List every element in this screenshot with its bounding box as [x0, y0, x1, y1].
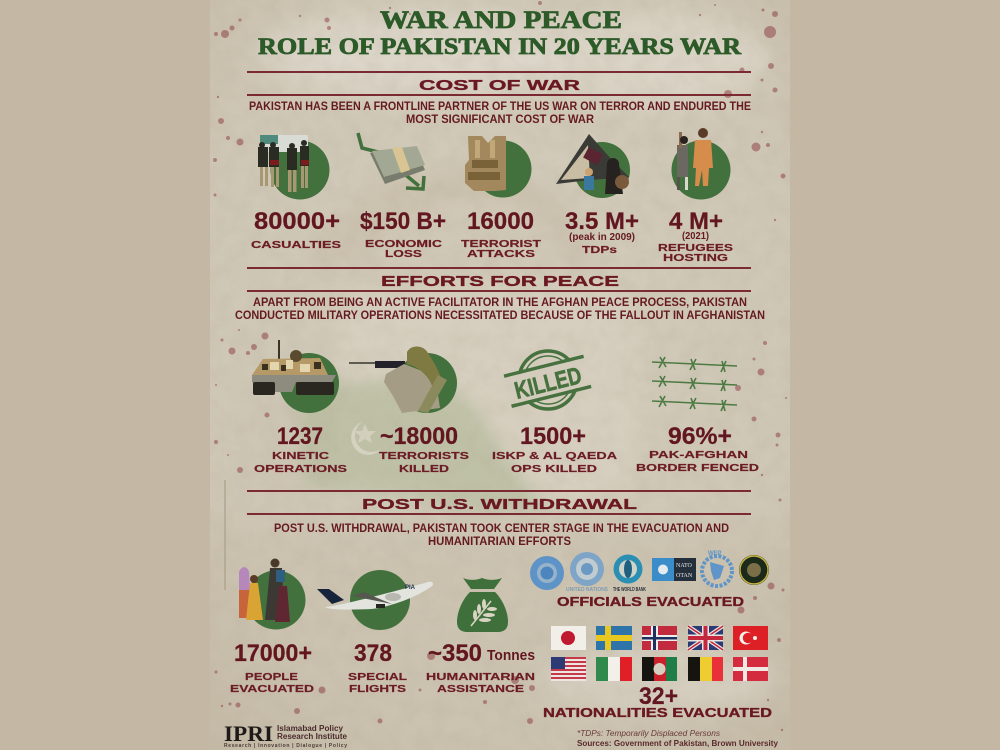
stat: humanitarian assistance: Tonnes: [487, 647, 535, 664]
stat: special flights: FLIGHTS: [349, 684, 406, 695]
stat: nationalities evacuated: [543, 683, 772, 720]
logo: US Army: [739, 555, 769, 585]
stat: people evacuated: EVACUATED: [230, 684, 314, 695]
cost of war intro text: [249, 101, 751, 126]
stat: refugees hosting: (2021): [682, 231, 709, 242]
cost of war intro text: MOST SIGNIFICANT COST OF WAR: [406, 114, 595, 126]
stat: terrorists killed: ~18000: [380, 423, 458, 450]
IPRI logo: IPRI: [224, 721, 273, 746]
stat: ISKP and Al Qaeda: ISKP & AL QAEDA: [492, 451, 617, 462]
icon: casualties soldiers: [258, 135, 330, 200]
flag: Italy: [596, 657, 632, 681]
stat: ISKP and Al Qaeda: 1500+: [520, 423, 586, 450]
IPRI logo: Research Institute: [277, 732, 348, 741]
stat: people evacuated: PEOPLE: [245, 672, 298, 683]
stat: people evacuated: [230, 640, 314, 695]
cost of war intro text: PAKISTAN HAS BEEN A FRONTLINE PARTNER OF THE US WAR ON TERROR AND ENDURED THE: [249, 101, 751, 113]
footnote and sources: [577, 728, 778, 748]
stat: humanitarian assistance: HUMANITARIAN: [426, 672, 535, 683]
stat: refugees hosting: REFUGEES: [658, 243, 733, 254]
stat: border fenced: 96%+: [668, 423, 732, 450]
footnote and sources: Sources: Government of Pakistan, Brown University: [577, 738, 778, 748]
logo: World Bank: THE WORLD BANK: [613, 587, 646, 593]
icon: PIA plane: [317, 570, 433, 630]
icon: displaced family tent: [556, 134, 630, 198]
icon: soldier with rifle: [349, 346, 457, 413]
logo: IMF: [530, 556, 564, 590]
stat: economic loss: [360, 208, 446, 260]
stat: economic loss: $150 B+: [360, 208, 446, 235]
stat: kinetic operations: KINETIC: [272, 451, 329, 462]
post withdrawal intro text: [274, 523, 729, 548]
stat: TDPs: (peak in 2009): [569, 232, 635, 243]
stats: post withdrawal: [230, 640, 535, 695]
stat: economic loss: ECONOMIC: [365, 239, 442, 250]
post withdrawal intro text: HUMANITARIAN EFFORTS: [428, 536, 571, 548]
logo: World Bank: [613, 554, 646, 593]
stat: nationalities evacuated: NATIONALITIES EVACUATED: [543, 705, 772, 720]
section heading: efforts for peace: EFFORTS FOR PEACE: [381, 273, 619, 290]
stat: border fenced: BORDER FENCED: [636, 463, 759, 474]
paper background with texture: [210, 0, 790, 750]
stat: nationalities evacuated: 32+: [639, 683, 678, 710]
logo: NATO: NATO: [676, 563, 693, 569]
title: WAR AND PEACE: [380, 7, 622, 34]
logo: WFP: WFP: [708, 551, 721, 557]
stat: special flights: [348, 640, 407, 695]
flag: Japan: [551, 626, 586, 650]
stat: casualties: CASUALTIES: [251, 240, 341, 251]
stat: ISKP and Al Qaeda: OPS KILLED: [511, 464, 597, 475]
stat: humanitarian assistance: [426, 640, 535, 695]
stat: terrorist attacks: ATTACKS: [467, 249, 535, 260]
stat: kinetic operations: OPERATIONS: [254, 464, 347, 475]
icon: tactical vest: [465, 136, 532, 198]
stat: border fenced: [636, 423, 759, 474]
flag: Belgium: [688, 657, 723, 681]
flag: Afghanistan: [642, 657, 677, 681]
stat: special flights: SPECIAL: [348, 672, 407, 683]
stat: ISKP and Al Qaeda: [492, 423, 617, 475]
icon: evacuated people: [239, 558, 306, 630]
flag: Norway: [642, 626, 677, 650]
stat: economic loss: LOSS: [385, 249, 422, 260]
icon: grain sack: [457, 578, 508, 632]
flag: United States: [551, 657, 586, 681]
flag: United Kingdom: [688, 626, 723, 650]
logo: NATO: [652, 558, 696, 581]
icon: tank: [252, 340, 339, 413]
stat: refugees hosting: HOSTING: [663, 253, 728, 264]
stat: casualties: 80000+: [254, 208, 340, 235]
IPRI logo: Islamabad Policy: [277, 724, 344, 733]
IPRI logo: [224, 721, 348, 749]
efforts for peace intro text: [235, 297, 765, 322]
title: [258, 7, 741, 59]
logo: NATO: OTAN: [676, 573, 693, 579]
icon: PIA plane: PIA: [405, 585, 416, 591]
stat: TDPs: 3.5 M+: [565, 208, 639, 235]
stat: humanitarian assistance: ASSISTANCE: [437, 684, 524, 695]
footnote and sources: *TDPs: Temporarily Displaced Persons: [577, 728, 721, 738]
stat: casualties: [251, 208, 341, 251]
stat: terrorist attacks: [461, 208, 541, 260]
stat: people evacuated: 17000+: [234, 640, 312, 667]
stat: terrorists killed: [379, 423, 469, 475]
logo: United Nations: [566, 552, 609, 593]
stat: special flights: 378: [354, 640, 392, 667]
icon: falling money with arrow: [358, 133, 425, 189]
stat: TDPs: TDPs: [582, 245, 618, 256]
stat: refugees hosting: 4 M+: [669, 208, 723, 235]
icon: refugees: [672, 128, 730, 200]
section heading: cost of war: COST OF WAR: [419, 77, 580, 94]
stats: efforts for peace: [254, 423, 759, 475]
flag: Sweden: [596, 626, 632, 650]
stat: border fenced: PAK-AFGHAN: [649, 450, 748, 461]
stat: terrorists killed: KILLED: [399, 464, 449, 475]
country flags: [551, 626, 768, 681]
flag: Turkey: [733, 626, 768, 650]
flag crescent and star: [351, 422, 381, 455]
organization logos: [530, 551, 769, 593]
stat: terrorists killed: TERRORISTS: [379, 451, 469, 462]
label: officials evacuated: OFFICIALS EVACUATED: [557, 594, 744, 609]
flag: Denmark: [733, 657, 768, 681]
IPRI logo: Research | Innovation | Dialogue | Policy: [224, 743, 347, 749]
stat: kinetic operations: 1237: [277, 423, 323, 450]
stat: terrorist attacks: TERRORIST: [461, 239, 541, 250]
post withdrawal intro text: POST U.S. WITHDRAWAL, PAKISTAN TOOK CENTER STAGE IN THE EVACUATION AND: [274, 523, 729, 535]
logo: WFP: [702, 551, 732, 586]
logo: United Nations: UNITED NATIONS: [566, 587, 609, 593]
stat: refugees hosting: [658, 208, 733, 264]
stat: kinetic operations: [254, 423, 347, 475]
icon: killed stamp: KILLED: [512, 362, 584, 405]
efforts for peace intro text: CONDUCTED MILITARY OPERATIONS NECESSITATED BECAUSE OF THE FALLOUT IN AFGHANISTAN: [235, 310, 765, 322]
stat: terrorist attacks: 16000: [467, 208, 534, 235]
blood spatter: [213, 1, 787, 731]
icon: killed stamp: [504, 351, 592, 409]
section heading: post U.S. withdrawal: POST U.S. WITHDRAWAL: [362, 496, 637, 513]
icon: barbed wire: [652, 357, 737, 411]
title: ROLE OF PAKISTAN IN 20 YEARS WAR: [258, 34, 741, 59]
stat: humanitarian assistance: ~350: [428, 640, 482, 667]
efforts for peace intro text: APART FROM BEING AN ACTIVE FACILITATOR IN THE AFGHAN PEACE PROCESS, PAKISTAN: [253, 297, 747, 309]
stat: TDPs: [565, 208, 639, 256]
stats: cost of war: [251, 208, 733, 264]
